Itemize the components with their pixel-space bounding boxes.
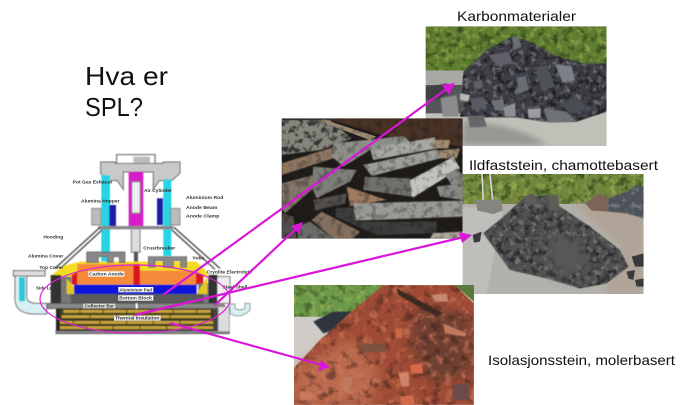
arrow: collector area to cathode blocks [215,222,303,305]
cell labels: Pot Gas Exhaust [73,180,113,185]
cell labels: Top Cover [39,265,64,270]
road [426,71,462,87]
arrow: bottom block to carbon materials [163,83,455,295]
photo: used cathode blocks [282,118,463,239]
cell labels: Collector Bar [85,304,114,309]
photo: chamotte refractory pile [463,174,644,294]
cell labels: Thermal Insulation [115,316,160,321]
label: Ildfaststein, chamottebasert: Ildfaststein, chamottebasert [469,157,658,173]
cell labels: Bottom Block [119,296,153,301]
title: Hva er [85,61,168,91]
pile [460,37,607,122]
diagram: aluminium electrolysis cell [13,155,253,334]
ground [426,113,461,118]
cell labels: Cryolite Electrolyte [207,270,253,275]
cell labels: Carbon Anode [89,272,124,277]
ellipse: spent pot lining outline [40,265,230,333]
cell labels: Steel Shell [223,284,247,289]
cell labels: Alumina Hopper [81,199,120,204]
arrow: lining to chamotte bricks [135,232,472,315]
cell labels [28,180,253,321]
cell labels: Anode Clamp [186,214,220,219]
title: SPL? [85,92,143,122]
cell labels: Alumina Cover [28,254,64,259]
arrow: thermal insulation to moler bricks [170,323,330,371]
title [85,61,168,122]
label: Isolasjonsstein, molerbasert: Isolasjonsstein, molerbasert [488,352,675,368]
cell labels: Crustbreaker [143,245,176,250]
bushes [426,26,607,71]
cell labels: Anode Beam [186,205,217,210]
label: Karbonmaterialer: Karbonmaterialer [457,8,576,24]
cell labels: Air Cylinder [144,188,172,193]
cell labels: Side Ledge [36,286,61,291]
rocks [426,36,590,127]
cell labels: Aluminium Rod [186,195,224,200]
cell labels: Yoke [192,255,205,260]
cell labels: Hooding [43,235,64,240]
photo: carbon material pile [426,26,607,146]
superstructure and pot [13,155,250,334]
cell labels: Aluminium Pad [119,287,152,292]
photo: moler insulating brick pile [294,285,474,405]
